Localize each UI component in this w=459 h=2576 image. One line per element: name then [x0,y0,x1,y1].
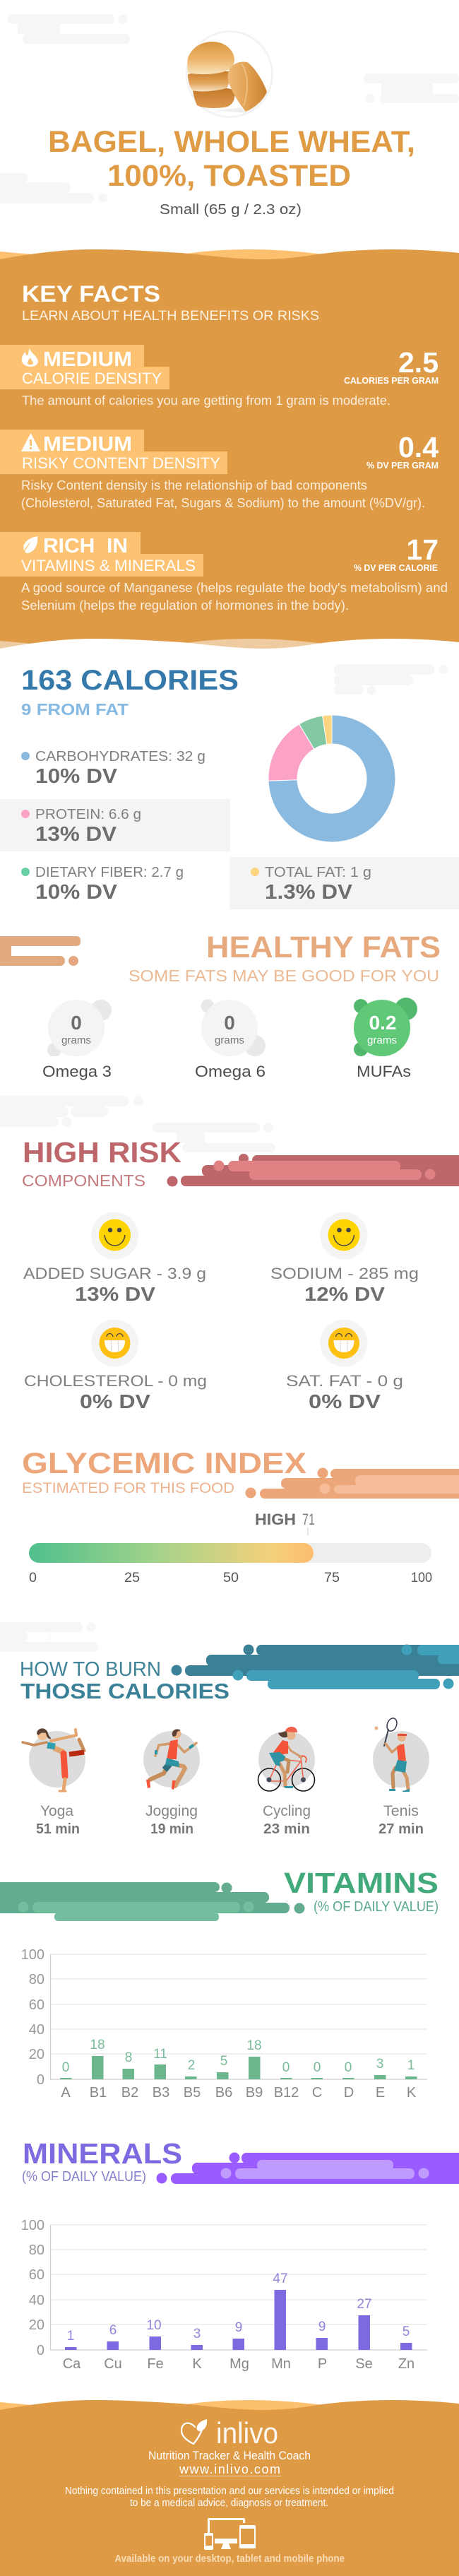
heading: HEALTHY FATS [206,930,441,964]
bar chart: vitamins: B3 [153,2085,169,2101]
fact: rich in vitamins and minerals: A good source of Manganese (helps regulate the body's metabolism) and [21,581,448,595]
website: www.inlivo.com [179,2462,280,2476]
bar chart: vitamins: B1 [90,2085,107,2101]
legend: total fat [251,865,371,904]
subheading: SOME FATS MAY BE GOOD FOR YOU [129,967,439,985]
panel: calories [0,664,459,909]
omega 3: Omega 3 [42,1063,112,1080]
gauge: 75 [324,1571,340,1585]
legend: dietary fiber: DIETARY FIBER: 2.7 g [35,865,184,880]
fact: risky content density: 0.4 [398,431,439,463]
bar chart: minerals: P [318,2356,327,2372]
sodium: 12% DV [304,1283,385,1305]
fact: risky content density [0,430,439,510]
bar chart: minerals: 3 [193,2327,201,2341]
added sugar: 13% DV [75,1283,155,1305]
bar chart: minerals: Mg [230,2356,249,2372]
bar chart: vitamins: B9 [246,2085,263,2101]
bar chart: vitamins: 0 [314,2060,321,2075]
bar chart: vitamins [21,1947,427,2101]
legend: carbohydrates: 10% DV [35,765,118,788]
fact: risky content density: % DV PER GRAM [366,460,439,471]
heading: MINERALS [23,2137,182,2170]
bar chart: minerals: Ca [63,2356,81,2372]
sat fat [286,1320,403,1412]
legend: protein: PROTEIN: 6.6 g [35,807,141,822]
legend: dietary fiber [21,865,184,904]
panel: key facts [0,249,459,661]
bar chart: minerals: 1 [67,2329,74,2344]
legend: total fat: 1.3% DV [265,881,353,904]
jogging minutes: 19 min [150,1821,193,1837]
disclaimer [65,2486,394,2509]
background clouds: hero [0,14,459,203]
icon: cyclist figure [258,1742,315,1791]
bar chart: minerals: 100 [21,2218,44,2233]
jogging [143,1729,200,1790]
subheading: (% OF DAILY VALUE) [22,2169,146,2185]
legend: carbohydrates: CARBOHYDRATES: 32 g [35,749,205,764]
fact: calorie density: The amount of calories you are getting from 1 gram is moderate. [22,394,391,408]
omega 3 [42,1000,112,1080]
gauge: 25 [124,1571,140,1585]
legend: total fat: TOTAL FAT: 1 g [265,865,371,880]
bar chart: vitamins: 3 [376,2057,383,2072]
icon: leaf [23,536,37,553]
bar chart: minerals: Mn [271,2356,291,2372]
gauge [29,1511,432,1585]
heading: LEARN ABOUT HEALTH BENEFITS OR RISKS [22,309,319,324]
bar chart: minerals: 0 [37,2343,44,2358]
legend: protein [21,807,141,846]
jogging label: Jogging [145,1803,198,1819]
bar chart: vitamins: 1 [407,2058,415,2073]
mufas: MUFAs [357,1063,411,1080]
fact: risky content density: MEDIUM [43,433,132,456]
bar chart: vitamins: B2 [121,2085,138,2101]
bar chart: vitamins: 0 [345,2060,352,2075]
bar chart: minerals: Se [355,2356,373,2372]
bar chart: vitamins: 8 [125,2050,132,2065]
omega 3: 0 [71,1012,82,1034]
mufas: 0.2 [369,1012,396,1034]
cholesterol [24,1320,207,1412]
yoga minutes: 51 min [36,1821,80,1837]
panel: footer [0,2400,459,2576]
bar chart: minerals: Zn [398,2356,415,2372]
heading: KEY FACTS [22,281,160,307]
availability note: Available on your desktop, tablet and mobile phone [114,2553,345,2565]
panel: healthy fats [0,930,441,1080]
bottom wave [0,639,323,652]
bar chart: minerals: 27 [357,2297,372,2312]
fact: rich in vitamins and minerals [0,532,448,613]
fact: risky content density: Risky Content density is the relationship of bad components [21,478,367,492]
title: 100%, TOASTED [107,159,351,193]
cloud [246,1468,459,1499]
legend: protein: 13% DV [35,823,117,846]
background clouds: middle [0,1096,275,1152]
bar chart: minerals: 60 [29,2267,44,2283]
heading [20,1658,230,1703]
donut chart [268,715,395,842]
icon: devices [204,2518,256,2550]
bar chart: vitamins: E [376,2085,385,2101]
legend: dietary fiber: 10% DV [35,881,118,904]
icon: smiley [328,1219,360,1251]
bottom bagel [193,87,234,108]
icon: yoga figure [23,1730,84,1791]
logo [181,2416,278,2450]
subheading: (% OF DAILY VALUE) [314,1899,439,1915]
bar chart: vitamins: 18 [246,2038,262,2053]
bar chart: minerals: 40 [29,2293,44,2308]
icon: runner figure [150,1743,196,1786]
sat fat: SAT. FAT - 0 g [286,1372,403,1390]
bar chart: minerals: Fe [147,2356,164,2372]
background cloud [334,664,448,695]
fact: risky content density: RISKY CONTENT DENSITY [22,454,220,472]
fact: rich in vitamins and minerals: % DV PER CALORIE [354,562,438,573]
heading: 163 CALORIES [21,665,239,696]
fact: calorie density: CALORIES PER GRAM [344,375,439,386]
gauge: 50 [223,1571,239,1585]
icon: smiley [99,1219,131,1251]
fact: calorie density [0,345,439,408]
fact: rich in vitamins and minerals: VITAMINS & MINERALS [21,557,196,574]
yoga label: Yoga [40,1803,73,1819]
heading: VITAMINS [284,1867,439,1899]
bar chart: minerals: 9 [235,2320,242,2335]
bar chart: minerals: 9 [318,2320,326,2334]
background cloud: burn [0,1622,98,1652]
omega 6 [195,999,266,1080]
omega 6: grams [215,1034,244,1046]
bar chart: vitamins: 20 [29,2047,44,2062]
legend: protein and fat backgrounds [0,799,459,909]
bar chart: vitamins: B5 [184,2085,201,2101]
bar chart: minerals: 5 [403,2324,410,2339]
cholesterol: CHOLESTEROL - 0 mg [24,1372,207,1390]
bar chart: vitamins: K [407,2085,417,2101]
heading: HOW TO BURN [20,1658,161,1681]
cycling label: Cycling [263,1803,311,1819]
bar chart: vitamins: 5 [220,2054,227,2069]
logo: inlivo [216,2416,278,2450]
bar chart: minerals: 20 [29,2317,44,2333]
bar chart: vitamins: 11 [153,2047,167,2062]
tennis label: Tenis [383,1803,419,1819]
panel: minerals [21,2137,459,2372]
omega 6: 0 [224,1012,235,1034]
fact: calorie density: 2.5 [398,346,439,379]
cloud [157,2152,459,2184]
bar chart: vitamins: 80 [29,1972,44,1987]
bar chart: minerals: 47 [273,2271,288,2286]
cloud [167,1154,459,1187]
sodium: SODIUM - 285 mg [270,1265,419,1282]
subheading: ESTIMATED FOR THIS FOOD [22,1480,234,1496]
panel: glycemic index [22,1446,459,1585]
sodium [270,1212,419,1305]
heading: GLYCEMIC INDEX [22,1446,306,1479]
legend: carbohydrates [21,749,205,788]
panel: how to burn [20,1645,459,1837]
leaning bagel [228,62,267,112]
icon: grin [99,1328,130,1359]
cycling [258,1727,315,1791]
bar chart: vitamins: B6 [215,2085,232,2101]
bar chart: minerals: 10 [146,2318,162,2333]
gauge: HIGH [255,1511,296,1528]
added sugar: ADDED SUGAR - 3.9 g [23,1265,206,1282]
top bagel [187,42,234,74]
fact: rich in vitamins and minerals: 17 [406,533,439,566]
title: BAGEL, WHOLE WHEAT, [48,125,415,159]
heading [22,281,319,324]
gauge: 71 [302,1511,315,1528]
omega 6: Omega 6 [195,1063,266,1080]
mufas: grams [367,1034,397,1046]
yoga [23,1728,85,1791]
bar chart: vitamins: 0 [62,2060,69,2075]
bar chart: vitamins: 18 [90,2038,105,2052]
subheading: 9 FROM FAT [21,700,129,719]
mufas [354,998,417,1080]
cloud [171,1645,459,1689]
cloud [0,936,81,966]
tennis minutes: 27 min [378,1821,424,1837]
cycling minutes: 23 min [263,1821,310,1837]
bar chart: vitamins: 2 [188,2058,195,2073]
sat fat: 0% DV [309,1390,381,1412]
bar chart: vitamins: 40 [29,2022,44,2038]
gauge: 100 [411,1571,432,1585]
omega 3: grams [61,1034,91,1046]
bar chart: vitamins: 0 [282,2060,290,2075]
bar chart: minerals: 6 [109,2323,117,2338]
food photo: bagels in a circle [186,31,273,117]
middle bagel [188,71,230,91]
serving size: Small (65 g / 2.3 oz) [160,202,302,218]
icon: tennis figure [374,1727,378,1730]
title [48,125,415,193]
cloud [0,1882,305,1921]
heading: THOSE CALORIES [20,1679,230,1703]
bar chart: minerals [21,2218,427,2372]
subheading: COMPONENTS [22,1171,145,1190]
fact: rich in vitamins and minerals: Selenium (helps the regulation of hormones in the body). [21,598,349,613]
bar chart: vitamins: 0 [37,2072,44,2088]
gauge: 0 [29,1571,37,1585]
bar chart: minerals: 80 [29,2243,44,2258]
bar chart: minerals: K [192,2356,202,2372]
bar chart: vitamins: 60 [29,1997,44,2013]
disclaimer: Nothing contained in this presentation and our services is intended or implied [65,2486,394,2497]
icon: grin [328,1328,359,1359]
bar chart: vitamins: 100 [21,1947,44,1963]
bar chart: minerals: Cu [104,2356,122,2372]
panel: vitamins [0,1867,439,2101]
bar chart: vitamins: A [61,2085,71,2101]
bar chart: vitamins: B12 [274,2085,299,2101]
panel: high risk [22,1136,459,1412]
tennis [373,1717,429,1792]
icon: warning triangle [21,433,40,451]
heading: HIGH RISK [23,1136,181,1169]
bar chart: vitamins: C [312,2085,322,2101]
fact: rich in vitamins and minerals: RICH IN [43,535,128,557]
fact: risky content density: (Cholesterol, Saturated Fat, Sugars & Sodium) to the amount (%DV/gr). [21,496,425,510]
icon: flame [22,348,38,367]
fact: calorie density: MEDIUM [43,348,132,371]
cholesterol: 0% DV [80,1390,150,1412]
added sugar [23,1212,206,1305]
tagline: Nutrition Tracker & Health Coach [148,2449,311,2462]
bar chart: vitamins: D [344,2085,354,2101]
disclaimer: to be a medical advice, diagnosis or treatment. [130,2498,328,2509]
fact: calorie density: CALORIE DENSITY [22,370,162,387]
